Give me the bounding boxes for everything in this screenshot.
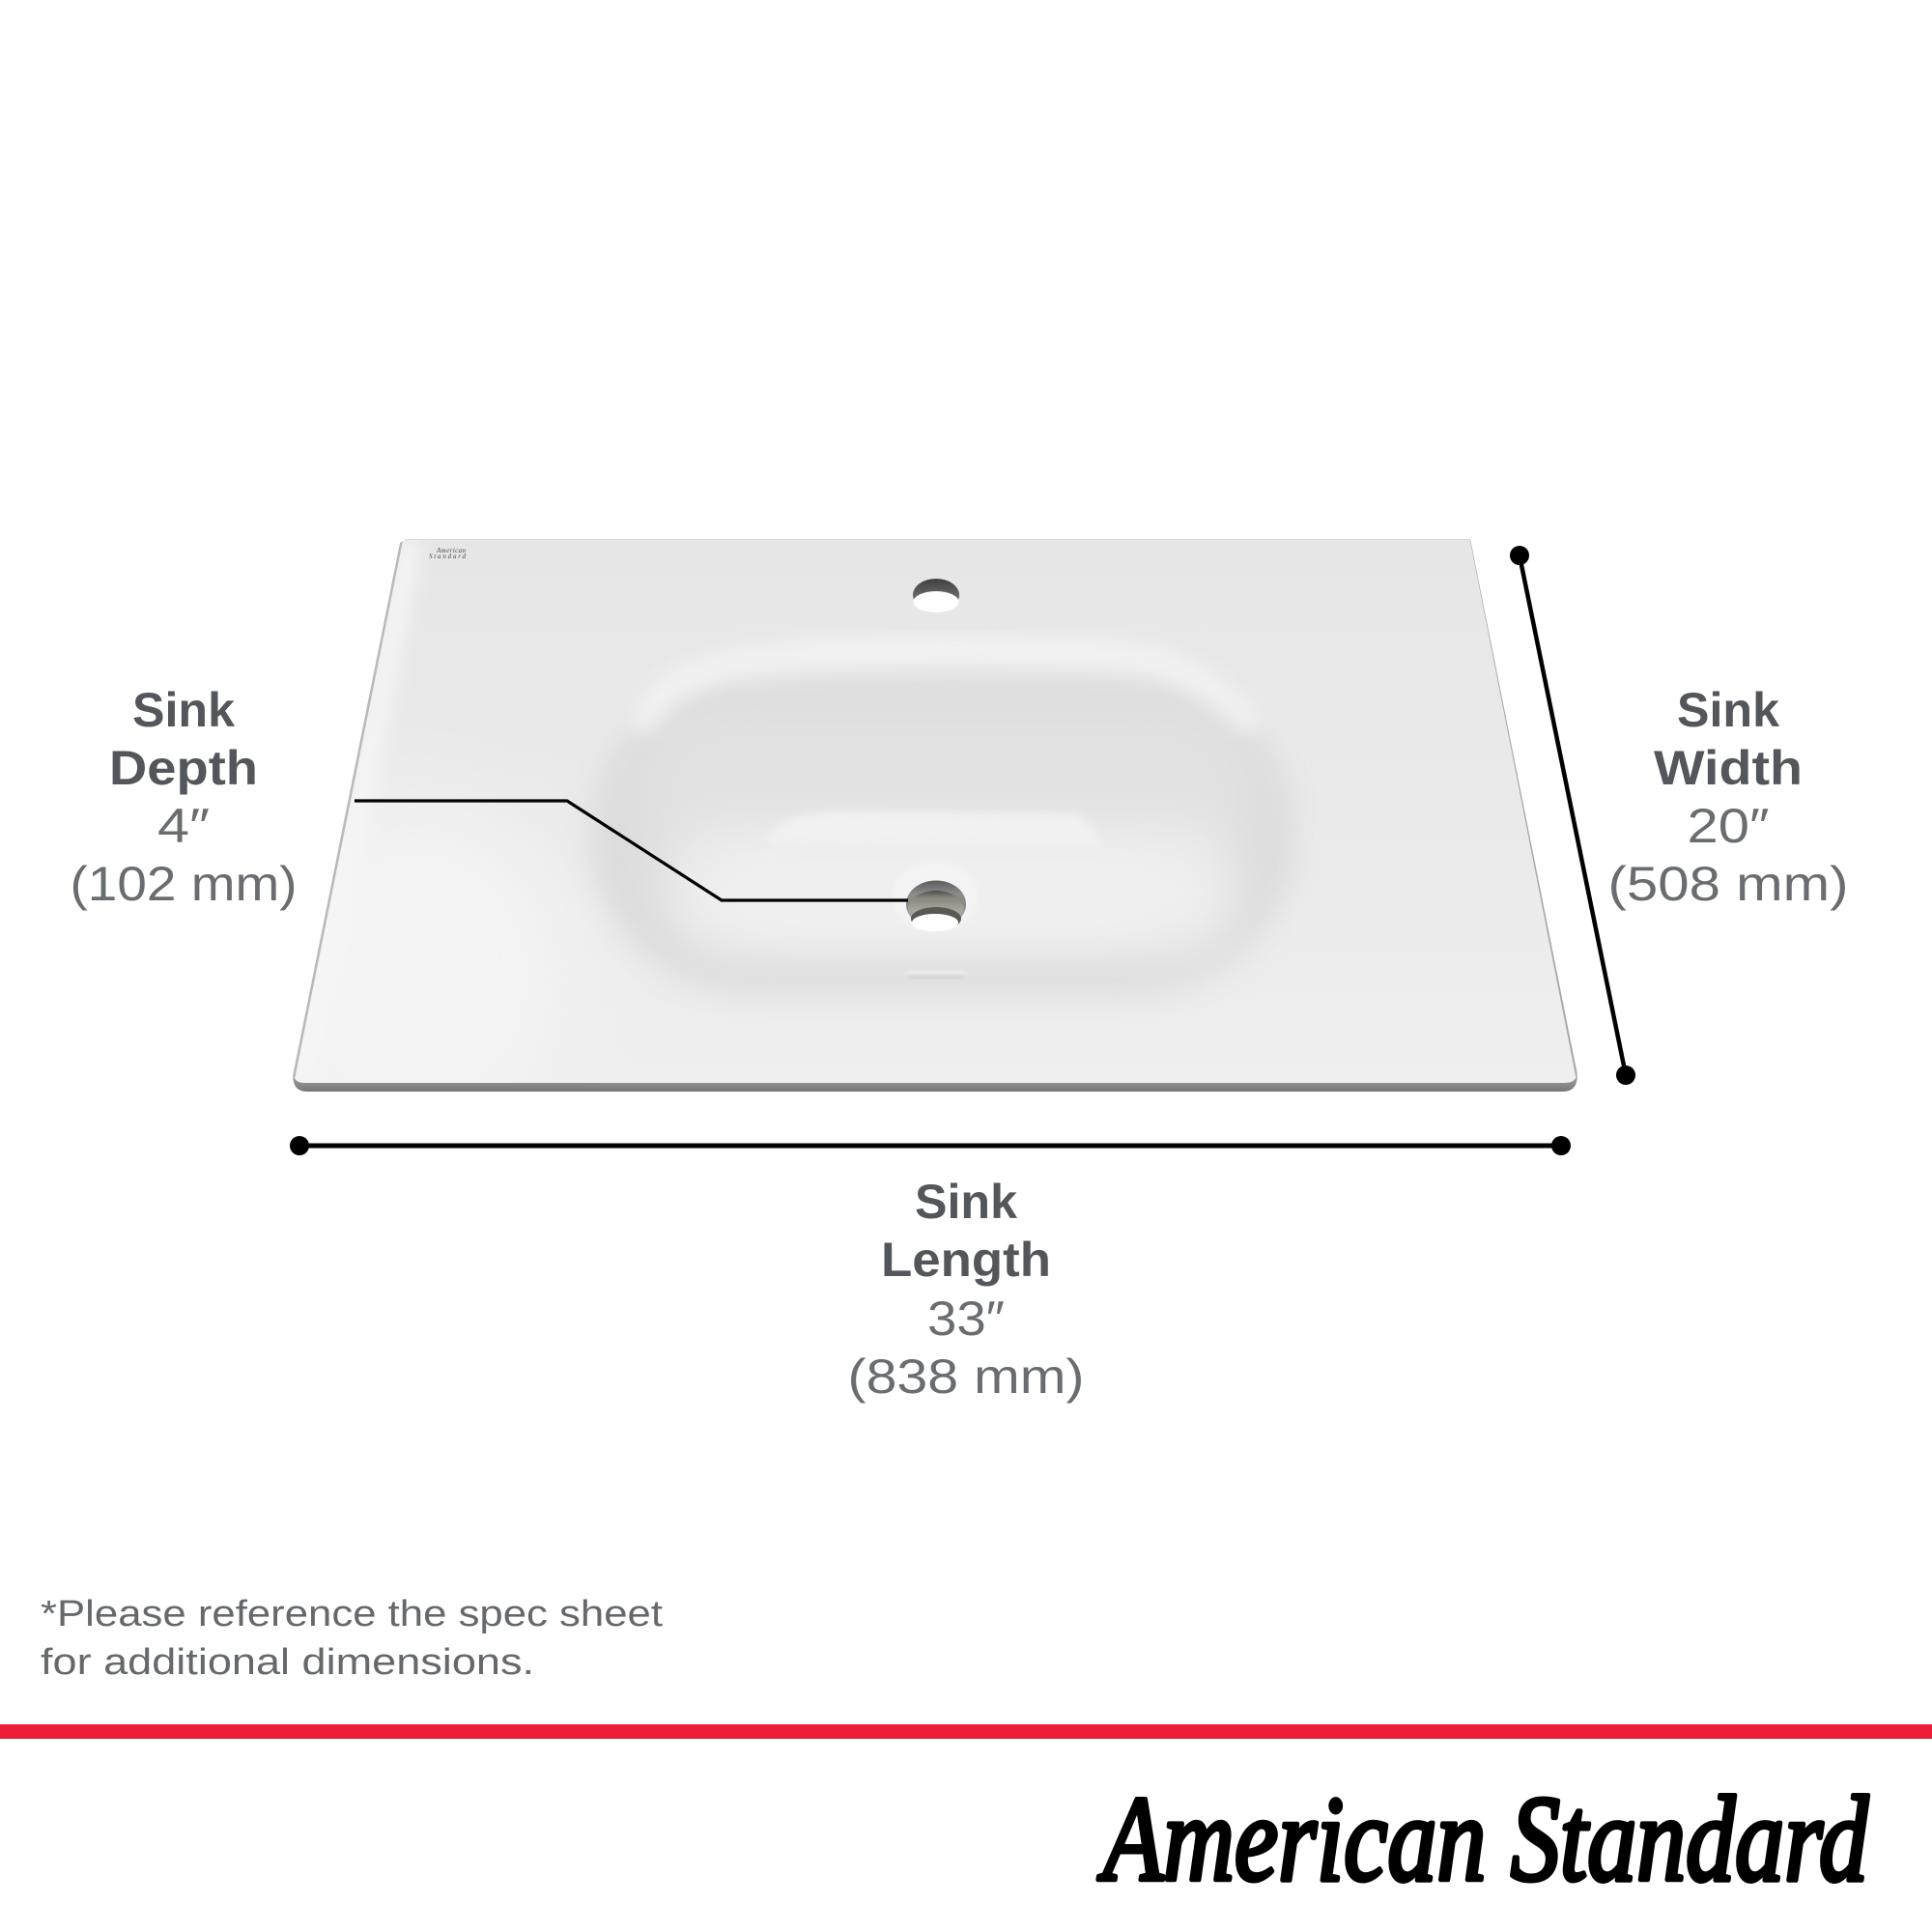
label: sink width: 20″: [1687, 799, 1770, 853]
label: sink length: (838 mm): [848, 1350, 1084, 1404]
label: sink length: 33″: [927, 1292, 1005, 1346]
footnote: [41, 1594, 664, 1683]
label: sink depth: [70, 683, 298, 911]
footnote: for additional dimensions.: [41, 1642, 534, 1683]
drain overflow mark: [906, 972, 966, 978]
label: sink depth: 4″: [157, 799, 210, 853]
sink logo mark: [429, 547, 466, 560]
depth leader line: [355, 801, 908, 900]
label: sink length: Length: [881, 1233, 1051, 1287]
sink logo mark: American: [436, 547, 466, 554]
infographic canvas: [0, 539, 1932, 1884]
sink front edge: [293, 1068, 1577, 1092]
red divider bar: [0, 1724, 1932, 1739]
basin upper interior: [638, 705, 1256, 889]
basin bowl: [591, 650, 1294, 995]
sink illustration: [261, 539, 1577, 1130]
label: sink width: Sink: [1677, 683, 1779, 737]
label: sink width: Width: [1654, 741, 1803, 795]
label: sink length: [848, 1175, 1084, 1404]
basin outer shadow: [591, 676, 1294, 995]
basin rim highlight: [645, 650, 1246, 720]
length dimension line: [290, 1136, 1571, 1155]
basin lower floor: [667, 831, 1236, 956]
label: sink depth: (102 mm): [70, 857, 298, 911]
label: sink length: Sink: [915, 1175, 1017, 1229]
label: sink depth: Depth: [109, 741, 258, 795]
footnote: *Please reference the spec sheet: [41, 1594, 664, 1634]
sink surface sheen: [294, 539, 1577, 1083]
sink deck: [294, 539, 1577, 1083]
label: sink depth: Sink: [132, 683, 235, 737]
basin shelf highlight: [767, 811, 1101, 845]
sink logo mark: Standard: [429, 553, 466, 560]
drain: [892, 862, 979, 931]
faucet hole: [913, 579, 959, 612]
width dimension line: [1510, 546, 1635, 1085]
label: sink width: [1607, 683, 1849, 911]
label: sink width: (508 mm): [1607, 857, 1849, 911]
